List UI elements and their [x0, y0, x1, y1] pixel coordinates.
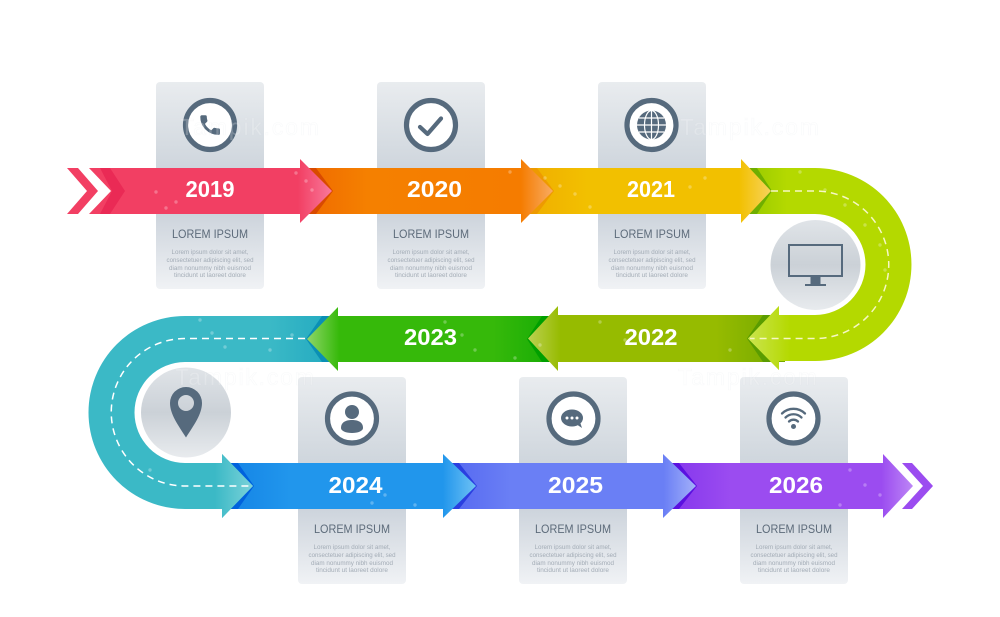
card text: 2024: Lorem ipsum dolor sit amet,	[314, 544, 391, 551]
end chevron: purple	[902, 463, 933, 509]
icon: phone	[186, 100, 234, 150]
watermark: Tampik.com	[180, 114, 321, 140]
card text: 2024: consectetuer adipiscing elit, sed	[308, 552, 396, 559]
card heading: 2019: LOREM IPSUM	[172, 227, 248, 241]
year: 2025: 2025	[548, 472, 603, 498]
arrow: 2025	[448, 454, 696, 518]
card heading: 2021: LOREM IPSUM	[614, 227, 690, 241]
card: 2021	[598, 82, 706, 289]
card: 2020	[377, 82, 485, 289]
arrow: 2021	[526, 159, 771, 223]
curved arrow: lime	[745, 168, 911, 370]
card text: 2019: diam nonummy nibh euismod	[169, 265, 251, 272]
card text: 2019: tincidunt ut laoreet dolore	[174, 272, 246, 279]
card: 2025	[519, 377, 627, 584]
card text: 2025	[530, 544, 617, 574]
arrow: 2022	[528, 306, 785, 371]
card text: 2025: consectetuer adipiscing elit, sed	[530, 552, 617, 559]
card text: 2020: consectetuer adipiscing elit, sed	[388, 257, 475, 264]
card text: 2025: tincidunt ut laoreet dolore	[537, 567, 609, 574]
arrow: 2019	[89, 159, 332, 223]
icon: wifi	[769, 394, 818, 443]
card text: 2021: Lorem ipsum dolor sit amet,	[614, 249, 691, 256]
year: 2019: 2019	[186, 176, 234, 202]
card text: 2021: diam nonummy nibh euismod	[611, 265, 693, 272]
card: 2026	[740, 377, 848, 584]
card text: 2020	[388, 249, 475, 279]
card text: 2024	[308, 544, 396, 574]
watermark	[175, 114, 821, 390]
icon: speech bubble	[549, 394, 598, 443]
card: 2019	[156, 82, 264, 289]
icon: check mark	[406, 100, 456, 150]
card text: 2026: Lorem ipsum dolor sit amet,	[756, 544, 833, 551]
card text: 2025: diam nonummy nibh euismod	[532, 560, 614, 567]
card text: 2026: diam nonummy nibh euismod	[753, 560, 835, 567]
card text: 2026: consectetuer adipiscing elit, sed	[750, 552, 838, 559]
year: 2026: 2026	[769, 472, 823, 498]
card text: 2021: tincidunt ut laoreet dolore	[616, 272, 688, 279]
card text: 2021: consectetuer adipiscing elit, sed	[608, 257, 696, 264]
watermark: Tampik.com	[678, 364, 819, 390]
card heading: 2024: LOREM IPSUM	[314, 522, 390, 536]
card text: 2026: tincidunt ut laoreet dolore	[758, 567, 830, 574]
year: 2022: 2022	[624, 324, 678, 350]
curved arrow: teal	[88, 316, 345, 518]
year: 2020: 2020	[407, 176, 462, 202]
arrow: 2024	[228, 454, 476, 518]
card text: 2025: Lorem ipsum dolor sit amet,	[534, 544, 612, 551]
card text: 2026	[750, 544, 838, 574]
watermark: Tampik.com	[680, 114, 821, 140]
icon: user	[328, 394, 376, 443]
monitor disc	[770, 220, 860, 310]
location disc	[141, 368, 231, 458]
card text: 2024: tincidunt ut laoreet dolore	[316, 567, 388, 574]
card text: 2024: diam nonummy nibh euismod	[311, 560, 393, 567]
card heading: 2026: LOREM IPSUM	[756, 522, 832, 536]
watermark: Tampik.com	[175, 364, 316, 390]
card heading: 2025: LOREM IPSUM	[535, 522, 611, 536]
card: 2024	[298, 377, 406, 584]
arrow: 2026	[670, 454, 913, 518]
card text: 2020: tincidunt ut laoreet dolore	[395, 272, 467, 279]
card text: 2020: diam nonummy nibh euismod	[390, 265, 472, 272]
card text: 2021	[608, 249, 696, 279]
year: 2024: 2024	[328, 472, 383, 498]
arrow: 2020	[305, 159, 553, 223]
icon: monitor	[789, 245, 842, 286]
start chevron: red	[67, 168, 98, 214]
card text: 2019: Lorem ipsum dolor sit amet,	[172, 249, 249, 256]
year: 2021: 2021	[627, 176, 675, 202]
year: 2023: 2023	[404, 324, 457, 350]
arrow: 2023	[307, 307, 556, 371]
card text: 2019: consectetuer adipiscing elit, sed	[166, 257, 254, 264]
icon: map pin	[170, 387, 202, 438]
icon: globe	[627, 100, 676, 150]
card text: 2020: Lorem ipsum dolor sit amet,	[392, 249, 470, 256]
card text: 2019	[166, 249, 254, 279]
card heading: 2020: LOREM IPSUM	[393, 227, 469, 241]
